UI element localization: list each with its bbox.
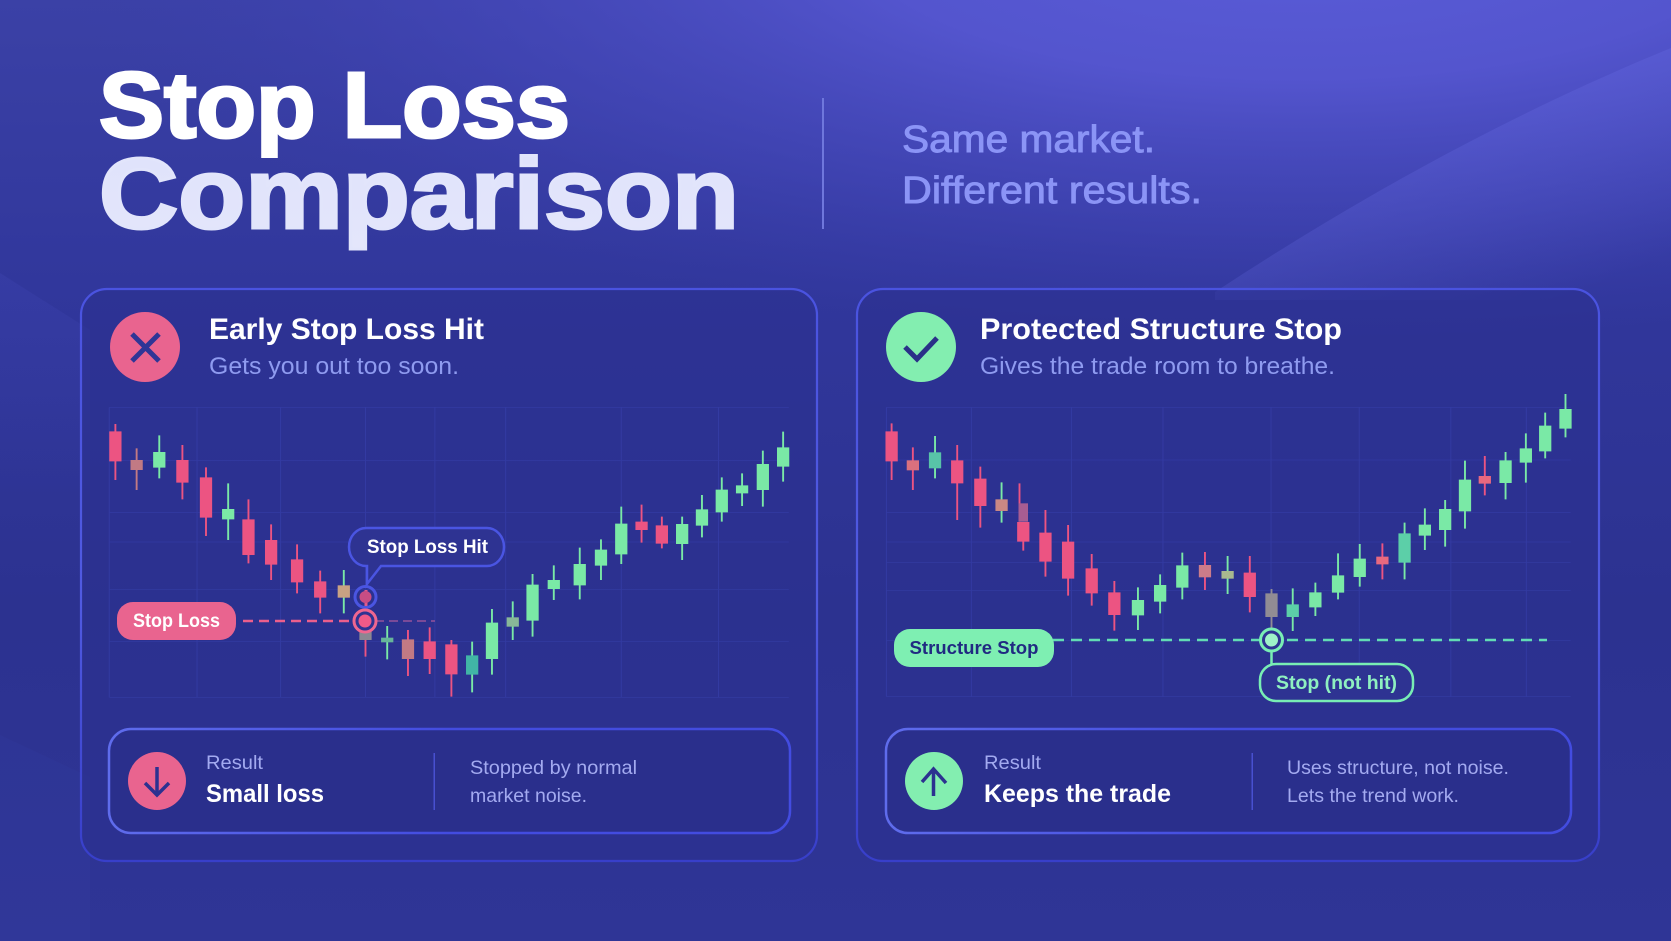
- label: stop loss: Stop Loss: [133, 611, 220, 632]
- stop loss hit marker: [354, 586, 376, 632]
- title: Comparison: [99, 138, 739, 250]
- result box: keeps the trade: [886, 729, 1571, 833]
- result description: Uses structure, not noise.: [1287, 757, 1509, 779]
- callout: stop loss hit: Stop Loss Hit: [367, 537, 489, 558]
- result label: Result: [206, 753, 264, 774]
- panel heading: Protected Structure Stop: [980, 313, 1342, 346]
- result description: [470, 757, 637, 807]
- result value: Small loss: [206, 780, 324, 808]
- structure stop line: [1053, 639, 1547, 641]
- result description: [1287, 757, 1509, 807]
- icon: check mark: [886, 312, 956, 382]
- panel subheading: Gives the trade room to breathe.: [980, 353, 1335, 380]
- icon: x mark: [110, 312, 180, 382]
- result description: Lets the trend work.: [1287, 785, 1459, 807]
- result label: Result: [984, 753, 1042, 774]
- panel: early stop loss hit: [81, 289, 817, 861]
- structure stop marker: [1260, 629, 1282, 664]
- icon: up arrow: [905, 752, 963, 810]
- title: [99, 53, 739, 250]
- callout: stop not hit: Stop (not hit): [1276, 673, 1397, 694]
- title: Stop Loss: [99, 53, 570, 157]
- result value: Keeps the trade: [984, 780, 1171, 808]
- subtitle: Same market.: [902, 119, 1155, 161]
- label: structure stop: [894, 629, 1054, 667]
- result box: small loss: [109, 729, 790, 833]
- icon: down arrow: [128, 752, 186, 810]
- panel: protected structure stop: [857, 289, 1599, 861]
- candlestick chart: structure stop: [886, 394, 1571, 697]
- subtitle: Different results.: [902, 170, 1202, 212]
- candlestick chart: early stop: [109, 407, 789, 697]
- panel subheading: Gets you out too soon.: [209, 353, 459, 380]
- label: stop loss: [117, 602, 236, 640]
- callout: stop not hit: [1260, 664, 1413, 701]
- subtitle: [902, 119, 1202, 212]
- panel heading: Early Stop Loss Hit: [209, 313, 484, 346]
- stop loss line: [243, 620, 435, 622]
- result description: Stopped by normal: [470, 757, 637, 779]
- label: structure stop: Structure Stop: [910, 637, 1038, 658]
- callout: stop loss hit: [349, 528, 504, 584]
- result description: market noise.: [470, 785, 587, 807]
